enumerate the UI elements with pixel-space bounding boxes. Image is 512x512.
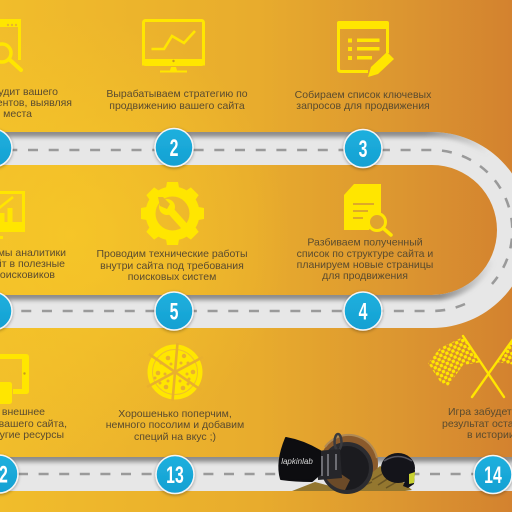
step marker 2 (155, 128, 193, 166)
step 2: text: продвижению вашего сайта (109, 100, 245, 112)
step 5: text: внутри сайта под требования (100, 260, 244, 272)
step 5: icon gear with wrench (141, 182, 204, 245)
step marker 1 (0, 129, 12, 167)
step 2: icon monitor (142, 20, 205, 72)
megaphone label: lapkinlab (281, 457, 313, 466)
step marker 3 (344, 130, 382, 168)
step 6: icon chart (0, 192, 25, 239)
step marker 14 (474, 456, 512, 494)
step 4: text: список по структуре сайта и (297, 248, 433, 260)
megaphone (279, 438, 320, 481)
step 4: text: Разбиваем полученный (307, 236, 423, 248)
step marker 13: 13 (166, 463, 184, 489)
snail shell (320, 435, 378, 493)
snail body (292, 466, 412, 491)
step 1: icon window with magnifier (0, 19, 21, 70)
step 4: text: для продвижения (322, 270, 408, 282)
step marker 4: 4 (359, 299, 368, 325)
step marker 12 (0, 455, 18, 493)
helmet (381, 453, 415, 488)
step 13: text: специй на вкус ;) (134, 431, 216, 443)
step 5: text: Проводим технические работы (96, 248, 248, 260)
steering ring (323, 434, 371, 492)
step 4: text: планируем новые страницы (297, 259, 433, 271)
step 3: icon list and pencil (337, 21, 394, 77)
step marker 3: 3 (359, 137, 367, 163)
step marker 6 (0, 292, 12, 330)
finish icon: crossed checkered flags (428, 335, 512, 397)
step 2: text: Вырабатываем стратегию по (106, 88, 248, 100)
step marker 5 (155, 292, 193, 330)
step 3: text: запросов для продвижения (296, 100, 430, 112)
step 3: text: Собираем список ключевых (295, 89, 432, 101)
step 13: text: Хорошенько поперчим, (118, 408, 232, 420)
winding road upper section (0, 132, 512, 328)
step marker 4 (344, 292, 382, 330)
step marker 5: 5 (170, 299, 178, 325)
step marker 2: 2 (170, 136, 178, 162)
step marker 14: 14 (484, 463, 502, 489)
step marker 13 (156, 456, 194, 494)
road lower section (0, 457, 512, 491)
illustration: snail with megaphone and helmet (279, 434, 415, 493)
metal neck (317, 449, 342, 480)
step 13: text: немного посолим и добавим (106, 419, 244, 431)
step 13: icon pizza (147, 343, 203, 401)
step 12: icon tablet and phone (0, 354, 29, 404)
step 5: text: поисковых систем (128, 271, 216, 283)
step 4: icon document with magnifier (344, 184, 391, 235)
